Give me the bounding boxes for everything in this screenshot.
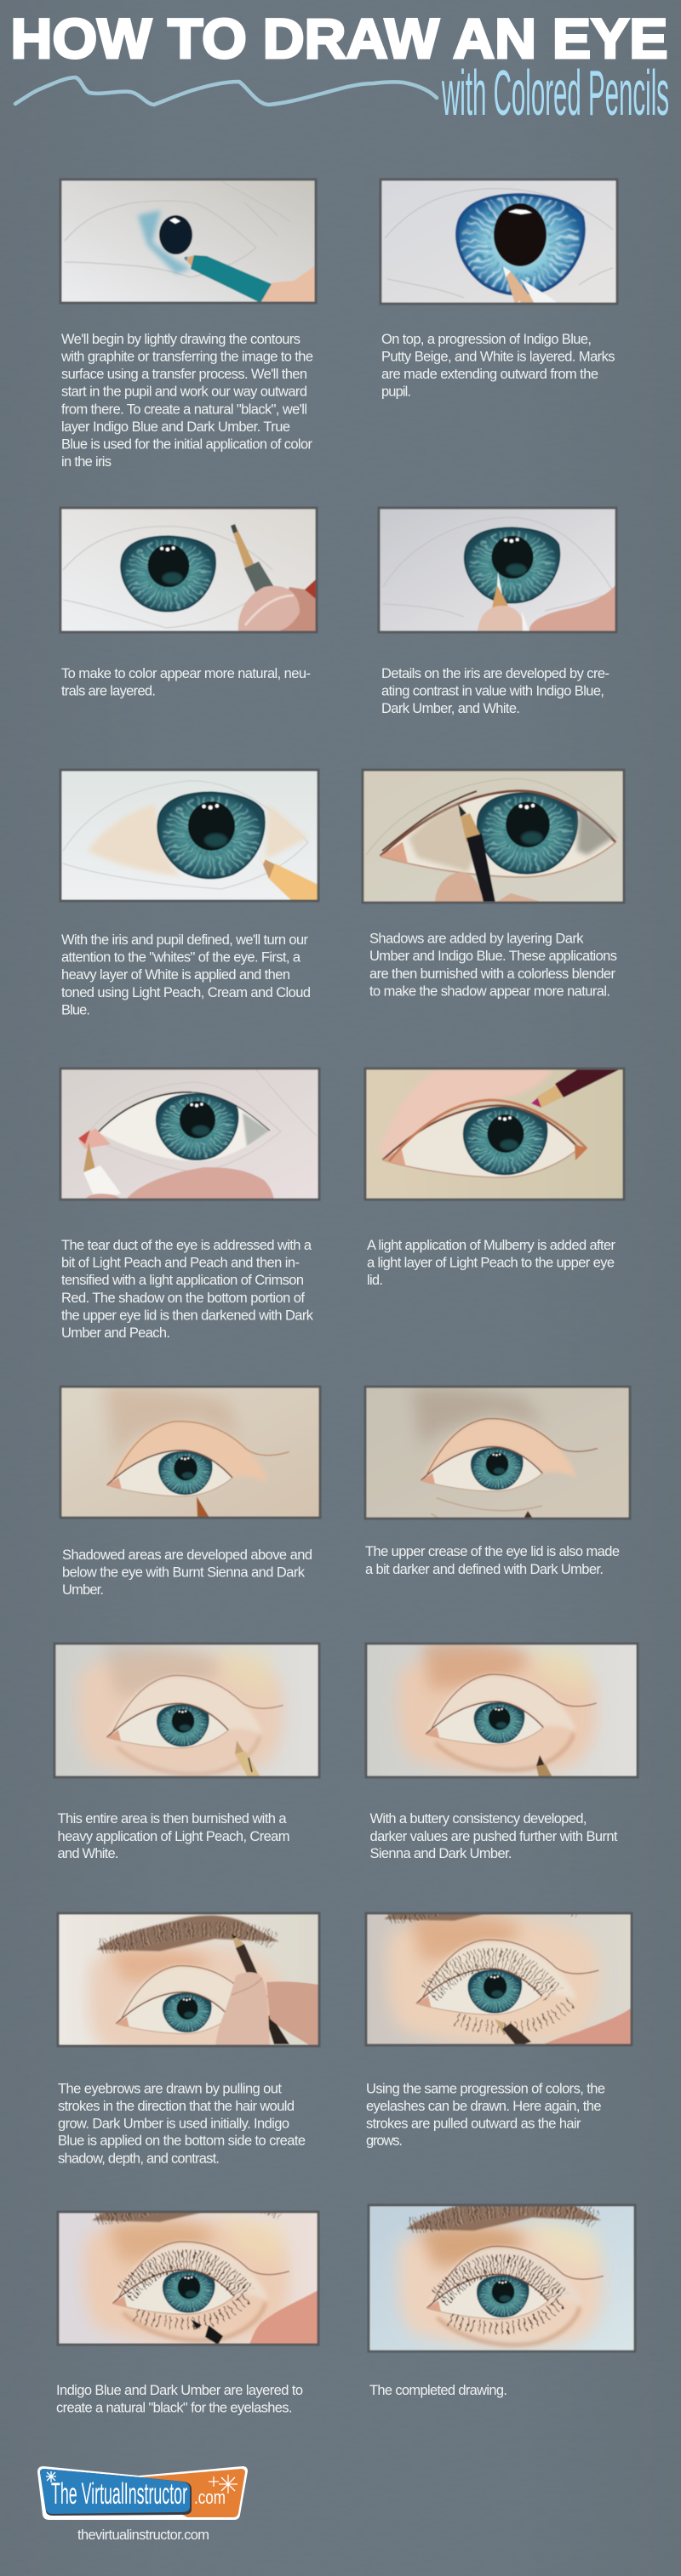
text: step 15: [56, 2383, 303, 2416]
hand: [541, 2008, 632, 2045]
iris: [157, 1094, 270, 1160]
skin wash: [77, 1653, 283, 1777]
hand: [478, 585, 615, 632]
text: step 5: [61, 932, 311, 1017]
text: step 2: pupil.: [381, 385, 411, 400]
text: step 1: [60, 332, 313, 470]
text: step 15: create a natural "black" for the eyelashes.: [56, 2401, 293, 2416]
lid: [106, 1675, 262, 1737]
lid: [426, 1674, 576, 1735]
lid: [426, 2246, 582, 2308]
pencil: [503, 266, 558, 304]
photo: step 13: [56, 1912, 321, 2048]
blue field: [40, 2469, 192, 2516]
text: step 1: We'll begin by lightly drawing the contours: [61, 332, 300, 347]
text: step 2: On top, a progression of Indigo Blue,: [381, 332, 592, 347]
text: step 5: Blue.: [61, 1002, 90, 1017]
photo: step 9: [59, 1385, 322, 1519]
text: step 12: Sienna and Dark Umber.: [369, 1846, 512, 1861]
text: step 3: trals are layered.: [61, 684, 156, 699]
lid: [112, 2242, 268, 2304]
text: step 7: The tear duct of the eye is addressed with a: [61, 1238, 312, 1253]
text: step 1: from there. To create a natural "black", we'll: [61, 402, 307, 417]
text: step 14: grows.: [366, 2134, 403, 2149]
brow sketch wash: [104, 1384, 240, 1460]
text: step 12: With a buttery consistency developed,: [369, 1811, 587, 1827]
peach wash on whites: [88, 804, 308, 876]
text: step 8: [367, 1238, 616, 1288]
text: step 1: in the iris: [61, 454, 112, 470]
text: step 6: to make the shadow appear more natural.: [369, 983, 610, 999]
eye: [416, 1969, 542, 2015]
pencil: [458, 804, 495, 903]
text: step 4: Dark Umber, and White.: [381, 701, 520, 716]
text: step 7: bit of Light Peach and Peach and then in-: [61, 1256, 300, 1271]
text: step 1: with graphite or transferring the image to the: [60, 349, 313, 364]
text: step 11: [58, 1811, 289, 1861]
text: step 13: The eyebrows are drawn by pulling out: [58, 2081, 282, 2096]
text: step 8: a light layer of Light Peach to the upper eye: [367, 1256, 615, 1271]
photo: step 8: [363, 1067, 626, 1201]
lashes: [430, 1958, 553, 1994]
text: step 8: lid.: [367, 1273, 383, 1288]
lashes: [126, 2259, 246, 2294]
photo: step 12: [364, 1642, 639, 1779]
text: step 1: Blue is used for the initial application of color: [61, 437, 313, 453]
logo stars: [46, 2471, 237, 2493]
text: step 7: the upper eye lid is then darkened with Dark: [61, 1308, 314, 1324]
lid: [116, 1966, 261, 2024]
text: step 5: With the iris and pupil defined, we'll turn our: [61, 932, 308, 948]
eye white: [98, 1092, 270, 1161]
hand: [435, 872, 545, 903]
skin wash: [398, 1652, 596, 1773]
upper lid line: [382, 791, 477, 851]
orange field: [128, 2469, 245, 2517]
lid: [416, 1940, 577, 2003]
text: step 7: Red. The shadow on the bottom portion of: [61, 1291, 305, 1306]
text: step 3: [61, 666, 311, 699]
iris: [457, 195, 584, 294]
pencil: [184, 255, 276, 303]
text: step 13: [58, 2081, 306, 2166]
text: step 2: are made extending outward from the: [381, 367, 598, 382]
photo: step 14: [364, 1912, 633, 2047]
text: step 9: Umber.: [62, 1582, 104, 1598]
logo name: The VirtualInstructor: [51, 2477, 187, 2510]
skin wash: [398, 2224, 603, 2348]
pencil: [191, 2319, 223, 2345]
text: step 2: [381, 332, 615, 400]
pencil: [232, 1934, 289, 2044]
eye: [112, 2270, 234, 2314]
text: step 12: darker values are pushed further with Burnt: [369, 1829, 618, 1844]
pencil squiggle: [15, 77, 437, 105]
text: step 6: are then burnished with a colorless blender: [369, 966, 616, 982]
photo: step 2: [379, 178, 619, 305]
orange upper lid: [389, 1100, 587, 1161]
text: step 10: a bit darker and defined with Dark Umber.: [365, 1562, 604, 1577]
text: step 10: [365, 1544, 620, 1577]
text: step 11: and White.: [58, 1846, 119, 1861]
pupil: [159, 215, 192, 254]
iris: [465, 527, 559, 603]
text: step 7: [61, 1238, 314, 1341]
text: step 13: grow. Dark Umber is used initially. Indigo: [58, 2116, 289, 2131]
text: step 8: A light application of Mulberry is added after: [367, 1238, 616, 1253]
iris first blue layer: [138, 210, 191, 274]
skin wash: [89, 1945, 281, 2060]
hand: [85, 1167, 274, 1200]
text: step 7: tensified with a light application of Crimson: [61, 1273, 304, 1288]
text: step 7: Umber and Peach.: [61, 1325, 170, 1341]
text: step 9: [62, 1547, 312, 1598]
text: step 16: The completed drawing.: [369, 2383, 507, 2398]
pencil: [495, 2019, 531, 2045]
eyebrow: [406, 2192, 601, 2231]
photo: step 11: [53, 1642, 321, 1779]
text: step 9: below the eye with Burnt Sienna and Dark: [62, 1565, 306, 1581]
text: step 6: Shadows are added by layering Dark: [369, 932, 584, 947]
pencil: [492, 572, 508, 607]
lid line and tear duct: [78, 1092, 270, 1148]
photo: step 1: [59, 178, 318, 305]
text: step 14: eyelashes can be drawn. Here again, the: [366, 2099, 601, 2114]
hand: [249, 2290, 318, 2345]
iris: [157, 792, 265, 878]
title: HOW TO DRAW AN EYE: [10, 7, 667, 70]
text: step 1: layer Indigo Blue and Dark Umber. True: [61, 419, 290, 435]
url text: thevirtualinstructor.com: [77, 2528, 209, 2543]
text: step 5: attention to the "whites" of the eye. First, a: [61, 950, 301, 966]
text: step 6: [369, 932, 617, 999]
photo: step 4: [377, 506, 618, 634]
photo: step 3: [59, 506, 318, 634]
hand: [260, 265, 316, 303]
shaded sclera left and right: [409, 804, 615, 872]
text: step 12: [369, 1811, 618, 1861]
iris: [121, 536, 215, 612]
logo white outline: [37, 2466, 248, 2520]
photo: step 5: [59, 768, 320, 903]
pink lid wash: [378, 1069, 553, 1159]
photo: step 16 completed drawing: [367, 2203, 637, 2353]
lashes: [440, 2264, 560, 2300]
text: step 10: The upper crease of the eye lid is also made: [365, 1544, 620, 1559]
text: step 15: Indigo Blue and Dark Umber are layered to: [56, 2383, 303, 2398]
pencil: [83, 1142, 121, 1200]
pencil: [235, 1741, 260, 1777]
text: step 13: strokes in the direction that the hair would: [58, 2099, 295, 2114]
text: step 14: Using the same progression of colors, the: [366, 2081, 605, 2096]
text: step 5: heavy layer of White is applied and then: [61, 967, 290, 983]
text: step 4: ating contrast in value with Indigo Blue,: [381, 684, 604, 699]
hand: [215, 1972, 319, 2046]
text: step 4: [381, 666, 609, 716]
text: step 9: Shadowed areas are developed above and: [62, 1547, 312, 1563]
hand: [238, 578, 317, 632]
photo: step 6: [361, 768, 626, 904]
eye: [383, 1105, 579, 1177]
text: step 5: toned using Light Peach, Cream and Cloud: [61, 985, 311, 1000]
eyebrow: [384, 1882, 586, 1921]
pencil: [531, 1069, 621, 1108]
eye: [426, 1701, 543, 1745]
text: step 3: To make to color appear more natural, neu-: [61, 666, 311, 681]
photo: step 7: [59, 1067, 321, 1201]
eyebrow: [97, 1916, 279, 1952]
text: step 13: Blue is applied on the bottom side to create: [58, 2134, 306, 2149]
text: step 13: shadow, depth, and contrast.: [58, 2151, 220, 2166]
text: step 6: Umber and Indigo Blue. These applications: [369, 949, 617, 964]
upper lid: [421, 1419, 576, 1480]
photo: step 10: [363, 1385, 632, 1520]
lower creases: [431, 1498, 545, 1530]
eye: [426, 2274, 548, 2319]
pencil: [197, 1496, 209, 1518]
text: step 14: strokes are pulled outward as the hair: [366, 2116, 581, 2131]
pencil: [231, 524, 274, 592]
eye: [421, 1447, 542, 1491]
eye: [106, 1703, 228, 1748]
skin wash: [386, 1916, 598, 2044]
upper lid: [107, 1422, 267, 1485]
brow sketch: [413, 1388, 545, 1448]
photo: step 15: [56, 2210, 320, 2346]
logo: The Virtual Instructor: [37, 2466, 248, 2520]
eye: [107, 1450, 232, 1496]
text: step 11: heavy application of Light Peach, Cream: [58, 1829, 289, 1844]
pencil: [260, 857, 318, 901]
logo .com: .com: [194, 2487, 226, 2508]
eye: [381, 791, 615, 877]
text: step 2: Putty Beige, and White is layered. Marks: [381, 349, 615, 364]
pencil: [524, 1511, 533, 1519]
skin wash: [83, 2219, 289, 2343]
eyebrow: [92, 2184, 287, 2222]
text: step 1: start in the pupil and work our way outward: [61, 385, 307, 400]
eye: [116, 1992, 230, 2034]
text: step 14: [366, 2081, 605, 2149]
text: step 4: Details on the iris are developed by cre-: [381, 666, 609, 681]
text: step 11: This entire area is then burnished with a: [58, 1811, 287, 1827]
text: step 1: surface using a transfer process. We'll then: [61, 367, 307, 382]
pencil: [536, 1755, 552, 1777]
pupil: [494, 203, 547, 266]
